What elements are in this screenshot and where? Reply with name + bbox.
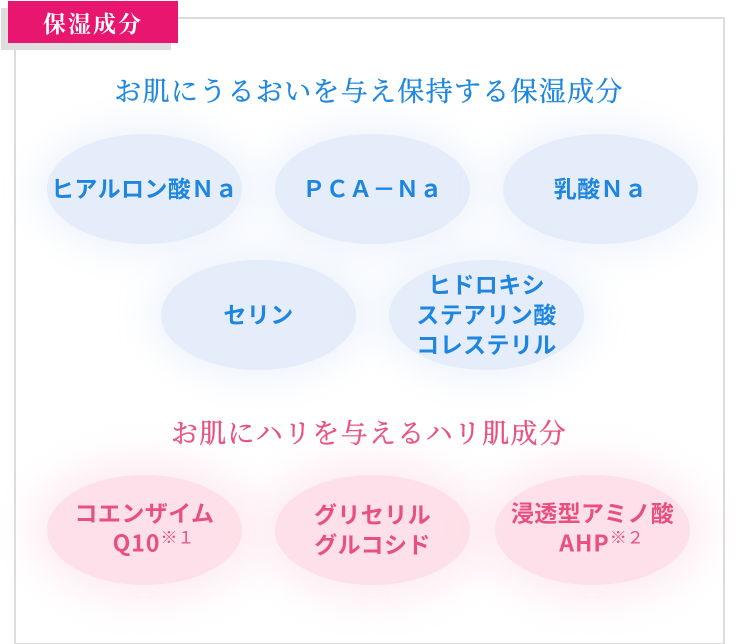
bubble: セリン: [161, 260, 356, 370]
bubble: ヒドロキシステアリン酸コレステリル: ステアリン酸: [416, 296, 557, 330]
bubble: コエンザイムQ10: [47, 475, 242, 585]
bubble: 浸透型アミノ酸AHP: AHP※２: [559, 524, 644, 558]
bubble: コエンザイムQ10: コエンザイム: [75, 494, 214, 528]
bubble: PCA-Na: [275, 134, 470, 244]
tag shadow: [1, 8, 171, 50]
bubble: 乳酸Na: 乳酸Ｎａ: [554, 170, 647, 204]
heading: firming ingredients: お肌にハリを与えるハリ肌成分: [171, 412, 567, 451]
bubble: ヒドロキシステアリン酸コレステリル: ヒドロキシ: [428, 266, 545, 300]
bubble: ヒアルロン酸Na: ヒアルロン酸Ｎａ: [51, 170, 238, 204]
heading: moisturizing ingredients: お肌にうるおいを与え保持する保湿成分: [114, 70, 624, 109]
bubble: 乳酸Na: [503, 134, 698, 244]
bubble: グリセリルグルコシド: [275, 475, 470, 585]
bubble: コエンザイムQ10: Q10※１: [113, 524, 194, 558]
bubble: セリン: セリン: [223, 296, 294, 330]
bubble: グリセリルグルコシド: グリセリル: [314, 496, 431, 530]
bubble: ヒアルロン酸Na: [47, 134, 242, 244]
tag: 保湿成分: 保湿成分: [43, 6, 143, 39]
tag: 保湿成分: [8, 1, 178, 43]
bubble: ヒドロキシステアリン酸コレステリル: コレステリル: [416, 326, 557, 360]
bubble: 浸透型アミノ酸AHP: 浸透型アミノ酸: [511, 494, 674, 528]
bubble: 浸透型アミノ酸AHP: [495, 475, 690, 585]
bubble: グリセリルグルコシド: グルコシド: [314, 526, 431, 560]
bubble: PCA-Na: ＰＣＡ－Ｎａ: [302, 170, 443, 204]
bubble: ヒドロキシステアリン酸コレステリル: [389, 260, 584, 370]
